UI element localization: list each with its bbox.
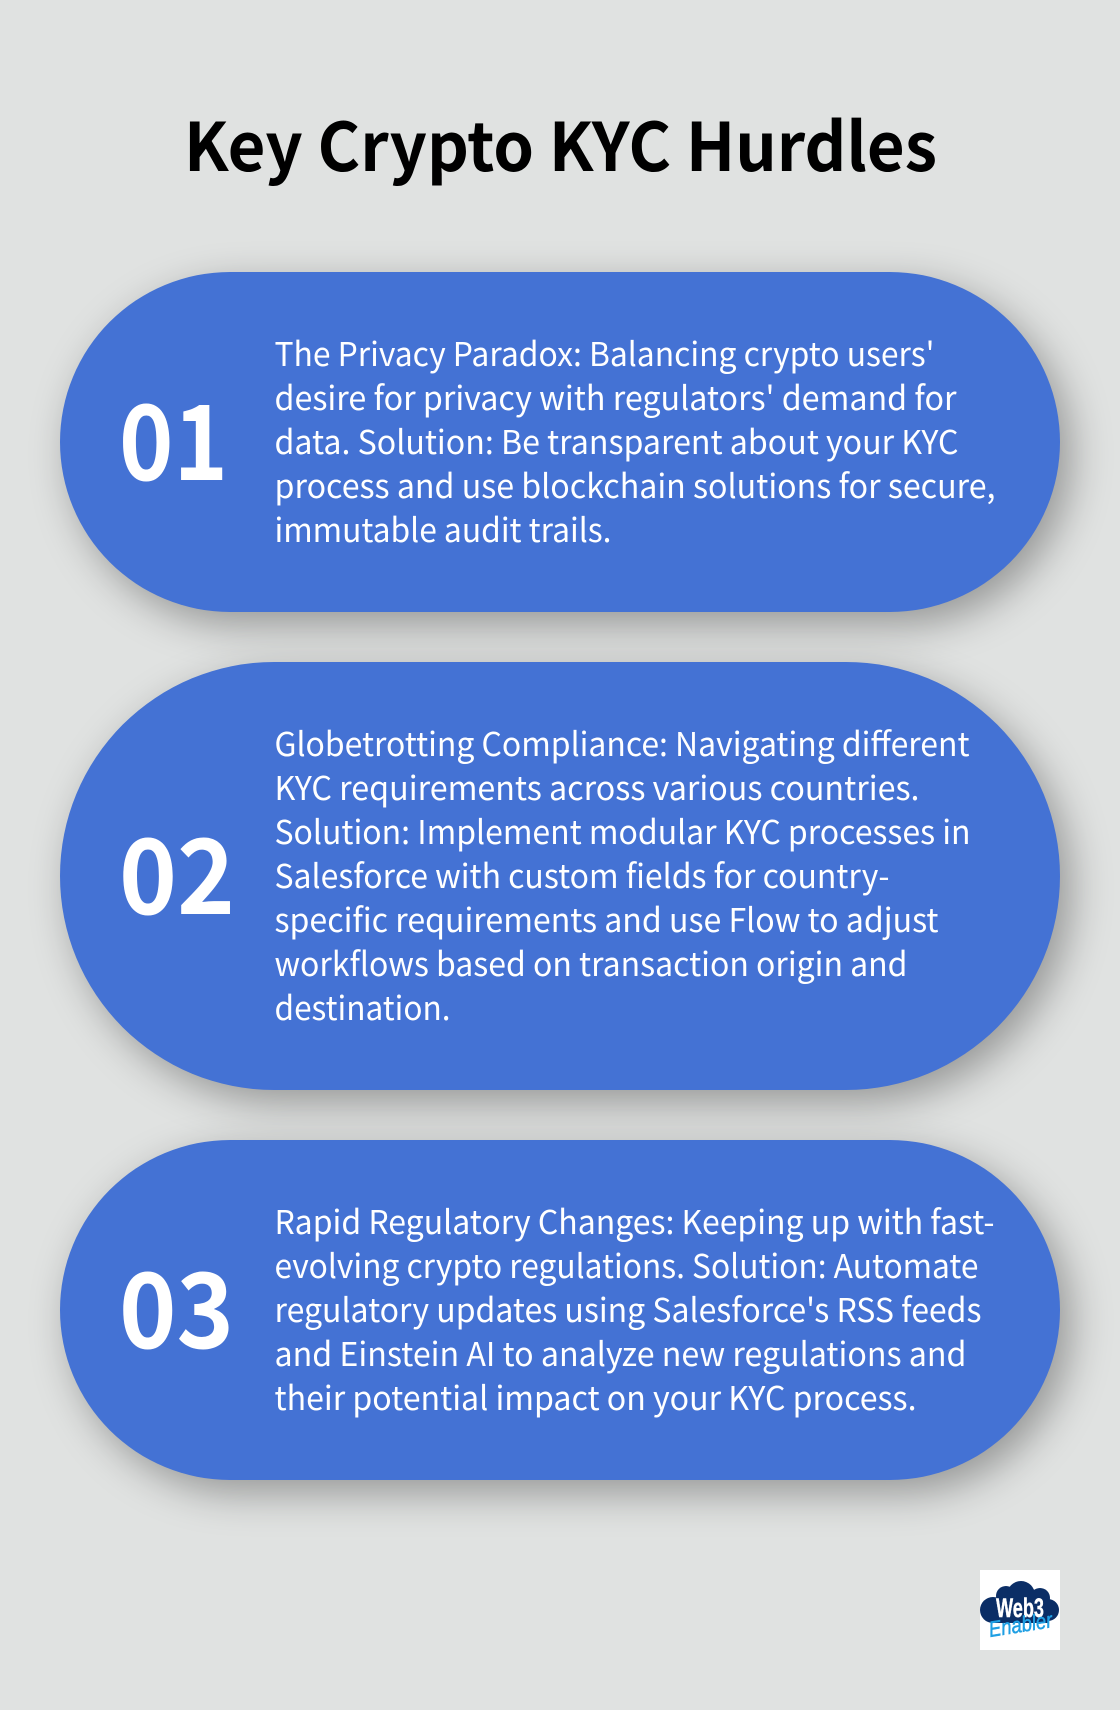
text block 02: Solution: Implement modular KYC processes in: [274, 806, 970, 854]
text block 02: specific requirements and use Flow to adjust: [274, 894, 938, 942]
text block 03: regulatory updates using Salesforce's RSS feeds: [274, 1284, 982, 1332]
text block 03: evolving crypto regulations. Solution: Automate: [274, 1240, 978, 1288]
text block 03: and Einstein AI to analyze new regulations and: [274, 1328, 966, 1376]
text block 01: The Privacy Paradox: Balancing crypto users': [274, 328, 934, 376]
pill background 03: [60, 1140, 1060, 1480]
text block 01: process and use blockchain solutions for secure,: [274, 460, 996, 508]
text block 02: KYC requirements across various countries.: [274, 762, 920, 810]
text block 02: destination.: [274, 982, 450, 1030]
title: Key Crypto KYC Hurdles: [184, 94, 937, 191]
panel: hurdle 01: [60, 272, 1060, 612]
text block 02: workflows based on transaction origin and: [274, 938, 908, 986]
panel: hurdle 02: [60, 662, 1060, 1090]
text block 01: [274, 328, 996, 552]
icon: Web3 Enabler logo: Web3: [996, 1593, 1044, 1623]
pill background 01: [60, 272, 1060, 612]
text block 03: their potential impact on your KYC process.: [274, 1372, 916, 1420]
pill background 02: [60, 662, 1060, 1090]
text block 01: data. Solution: Be transparent about your KYC: [274, 416, 958, 464]
icon: Web3 Enabler logo: [980, 1570, 1060, 1650]
text block 03: Rapid Regulatory Changes: Keeping up with fast-: [274, 1196, 994, 1244]
number 02: 02: [119, 793, 235, 944]
text block 02: [274, 718, 970, 1030]
icon: Web3 Enabler logo: Enabler: [987, 1607, 1055, 1642]
panel: hurdle 03: [60, 1140, 1060, 1480]
number 01: 01: [119, 359, 228, 510]
text block 01: immutable audit trails.: [274, 504, 612, 552]
text block 02: Globetrotting Compliance: Navigating different: [274, 718, 970, 766]
number 03: 03: [119, 1227, 234, 1378]
text block 02: Salesforce with custom fields for country-: [274, 850, 890, 898]
text block 01: desire for privacy with regulators' demand for: [274, 372, 957, 420]
text block 03: [274, 1196, 994, 1420]
